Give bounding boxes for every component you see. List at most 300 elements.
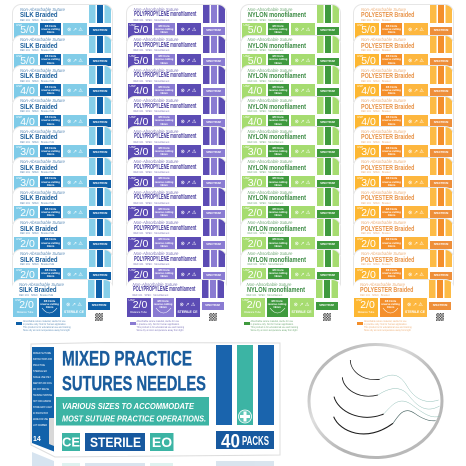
card: nylon 3/0: 3/0 [248,146,262,158]
card: silk 3/0: SILK Braided [20,163,58,172]
card: polyester 2/0 full pack: ⊗ ↗ ⚠ [407,302,423,308]
card: nylon 2/0: SPECTRUM [320,243,335,246]
card: polypropylene 4/0: 19mm [160,92,168,95]
title: SUTURES NEEDLES [62,372,206,396]
card: polypropylene 4/0 [126,65,226,102]
card: nylon 2/0: USP [244,206,250,210]
card: nylon 3/0: Non-Absorbable Suture [248,159,292,164]
card: polypropylene 3/0 [126,157,226,194]
card: nylon 2/0 full pack: USP [242,298,249,302]
card: polypropylene 5/0: reverse cutting [155,58,173,61]
card: polyester 5/0: ⊗ ↗ ⚠ [408,27,424,33]
card: nylon 4/0: SPECTRUM [320,121,335,124]
card: polyester 4/0: POLYESTER Braided [361,71,414,80]
card: silk 4/0: SILK Braided [20,71,58,80]
card: polyester 5/0 [353,4,454,41]
needle circle [309,344,442,458]
card: polyester 2/0: POLYESTER Braided [361,224,414,233]
card: polyester 2/0: Non-Absorbable Suture [361,220,406,225]
card: nylon 2/0: Non-Absorbable Suture [248,190,292,195]
card: silk 4/0: SILK Braided [20,102,58,111]
card: silk 2/0 full pack: Distance Tube [17,311,33,314]
card: nylon 3/0: NYLON monofilament [248,163,305,172]
card: polyester 2/0 full pack: Store dry at room temperature away from light [364,330,411,332]
card: silk 5/0 [12,35,113,72]
card: nylon 2/0 full pack: NYLON monofilament [246,285,304,294]
card: silk 4/0: ⊗ ↗ ⚠ [67,88,83,94]
card: polypropylene 2/0 full pack: SPECTRUM [205,304,220,307]
card: polypropylene 3/0: 3/0 [134,177,148,189]
card: nylon 3/0: ⊗ ↗ ⚠ [295,180,310,186]
card: polyester 2/0: Non-Absorbable Suture [361,251,406,256]
card: nylon 5/0: reverse cutting [269,58,287,61]
card: nylon 3/0: REF:101 SPEC Monofilament [248,171,283,174]
card: silk 2/0: 3/8 Circle [45,269,56,272]
card: polyester 3/0: 3/8 Circle [386,147,397,150]
card: polypropylene 3/0: reverse cutting [155,180,173,184]
card: silk 5/0: SILK Braided [20,10,58,19]
card: polypropylene 4/0: 3/8 Circle [158,116,170,119]
card: nylon 4/0: 19mm [274,92,282,95]
card: polyester 4/0: 19mm [388,123,395,126]
card: silk 2/0: Non-Absorbable Suture [20,190,65,195]
card: polypropylene 3/0: USP [130,176,136,180]
card: polyester 3/0: REF:101 SPEC Braided [361,141,390,144]
card: polyester 2/0: SPECTRUM [434,243,448,246]
card: polypropylene 2/0 full pack: This product is for educational use and training [136,327,184,329]
card: nylon 5/0: Non-Absorbable Suture [248,6,292,12]
card: silk 3/0 [12,126,113,163]
card: polypropylene 2/0: Non-Absorbable Suture [134,251,178,256]
card: polypropylene 2/0: ⊗ ↗ ⚠ [181,272,196,278]
card: polypropylene 4/0: SPECTRUM [206,121,221,124]
card: silk 5/0: 3/8 Circle [45,24,56,28]
card: silk 3/0: reverse cutting [41,150,60,153]
card: nylon 4/0: REF:101 SPEC Monofilament [248,80,283,83]
card: silk 2/0 full pack: SPECTRUM [92,304,106,307]
card: nylon 2/0 full pack: Non-Absorbable Suture [246,282,291,286]
banner [56,397,209,426]
card: silk 5/0: USP [16,23,22,27]
card: nylon 2/0: USP [244,268,250,272]
card: nylon 5/0: 19mm [274,62,282,64]
card: nylon 2/0: SPECTRUM [320,212,335,215]
card: silk 5/0: reverse cutting [41,58,60,61]
card: polypropylene 3/0: SPECTRUM [206,151,221,154]
card: polypropylene 2/0 full pack: Store dry at room temperature away from light [136,330,183,332]
card: nylon 3/0: Non-Absorbable Suture [248,129,292,134]
card: silk 3/0: ⊗ ↗ ⚠ [67,149,83,155]
card: polypropylene 4/0: REF:101 SPEC Monofilament [134,110,169,113]
card: nylon 5/0: 19mm [274,31,282,34]
card: polyester 5/0: 19mm [388,62,395,64]
card: nylon 4/0: ⊗ ↗ ⚠ [295,88,310,94]
card: silk 2/0: 19mm [47,214,54,217]
card: polypropylene 2/0: REF:101 SPEC Monofilament [134,202,169,205]
card: silk 3/0: Non-Absorbable Suture [20,129,65,134]
card: silk 2/0: ⊗ ↗ ⚠ [67,210,83,216]
card: polypropylene 5/0: SPECTRUM [206,60,221,63]
card: nylon 3/0: reverse cutting [269,180,287,184]
card: nylon 2/0: NYLON monofilament [248,224,305,233]
card: silk 2/0: REF:101 SPEC Braided Silk [20,202,54,205]
card: polyester 2/0: Non-Absorbable Suture [361,190,406,195]
card: polypropylene 4/0: ⊗ ↗ ⚠ [181,119,196,125]
box side panel: KEEP DRY AND COOL [33,381,52,385]
card: silk 4/0: reverse cutting [41,89,60,92]
card: polyester 2/0: 2/0 [361,268,376,280]
card: polyester 2/0 full pack: POLYESTER Braided [360,285,413,294]
card: nylon 2/0: Non-Absorbable Suture [248,220,292,225]
card: polypropylene 2/0: USP [130,237,136,241]
card: silk 3/0: Non-Absorbable Suture [20,159,65,164]
card: nylon 4/0: 3/8 Circle [272,86,284,89]
card: nylon 2/0: reverse cutting [269,242,287,245]
card: polyester 4/0: Non-Absorbable Suture [361,68,406,73]
card: polyester 2/0: ⊗ ↗ ⚠ [408,241,424,247]
card: polypropylene 4/0: 3/8 Circle [158,86,170,89]
card: polypropylene 4/0: 4/0 [134,116,148,128]
card: nylon 2/0: 2/0 [248,207,262,219]
panel: nylon suture packs [240,4,341,332]
card: polypropylene 2/0: reverse cutting [155,272,173,275]
card: polyester 2/0: reverse cutting [382,211,401,214]
card: polyester 5/0: Non-Absorbable Suture [361,6,406,12]
card: silk 2/0 full pack: Absorbable suture material, sterile for use [23,321,66,323]
40 packs badge [216,431,274,452]
card: polyester 5/0: POLYESTER Braided [361,41,414,50]
card: polypropylene 2/0: 19mm [160,245,168,248]
card: polyester 5/0: USP [357,23,363,27]
card: silk 5/0: Non-Absorbable Suture [20,37,65,42]
card: polyester 3/0: 19mm [388,153,395,156]
card: polyester 5/0: USP [357,54,363,58]
card: nylon 2/0 [240,218,340,255]
card: polyester 4/0: reverse cutting [382,89,401,92]
card: polypropylene 2/0: Non-Absorbable Suture [134,220,178,225]
card: silk 5/0: SPECTRUM [93,60,107,63]
card: polypropylene 4/0: USP [130,84,136,88]
card: polyester 2/0 full pack: 19mm [387,306,394,309]
card: nylon 2/0 [240,248,340,286]
card: silk 2/0: REF:101 SPEC Braided Silk [20,263,54,266]
card: polyester 2/0: 2/0 [361,238,376,250]
card: polypropylene 4/0: POLYPROPYLENE monofilament [134,72,196,79]
card: nylon 4/0: 4/0 [248,85,262,97]
card: silk 5/0: reverse cutting [41,28,60,31]
card: polyester 4/0: 3/8 Circle [386,116,397,119]
card: polyester 3/0: Non-Absorbable Suture [361,129,406,134]
card: polypropylene 2/0: SPECTRUM [206,274,221,276]
card: silk 4/0: USP [16,115,22,119]
card: polyester 2/0: USP [357,268,363,272]
card: polypropylene 2/0 full pack [126,279,226,336]
card: nylon 3/0 [240,126,340,163]
card: polypropylene 3/0: REF:101 SPEC Monofilament [134,171,169,174]
card: polyester 2/0: ⊗ ↗ ⚠ [408,272,424,278]
circular frame [309,344,442,458]
card: polypropylene 4/0: 19mm [160,123,168,126]
card: polypropylene 4/0: reverse cutting [155,119,173,122]
card: polypropylene 3/0: 3/8 Circle [158,147,170,150]
card: polypropylene 2/0: POLYPROPYLENE monofilament [134,256,196,262]
card: silk 3/0 [12,157,113,194]
card: polypropylene 2/0: ⊗ ↗ ⚠ [181,241,196,247]
card: silk 3/0: SPECTRUM [93,151,107,154]
card: silk 2/0: SILK Braided [20,254,58,264]
card: silk 2/0 full pack: ⊗ ↗ ⚠ [66,302,82,308]
card: polypropylene 5/0: USP [130,54,136,58]
card: polypropylene 5/0: REF:101 SPEC Monofilament [134,49,169,52]
card: silk 2/0: ⊗ ↗ ⚠ [67,241,83,247]
card: nylon 5/0: reverse cutting [269,28,287,31]
card: polypropylene 5/0: 3/8 Circle [158,24,170,28]
card: polyester 2/0: REF:101 SPEC Braided [361,232,390,235]
card: silk 2/0 full pack: STERILE CE [64,310,84,314]
card: polypropylene 3/0: POLYPROPYLENE monofilament [134,164,196,171]
card: polyester 5/0: SPECTRUM [434,29,448,32]
card: polypropylene 3/0: Non-Absorbable Suture [134,159,178,164]
box side panel: MIXED SUTURE [33,351,51,355]
card: polyester 3/0: reverse cutting [382,150,401,153]
box side panel: NOT FOR HUMANS [33,399,51,403]
card: silk 2/0 full pack: in practice only. Not for human application. [23,324,66,326]
card: silk 4/0: SPECTRUM [93,90,107,93]
card: silk 2/0 full pack [12,279,113,336]
card: polyester 5/0: 5/0 [361,24,376,36]
card: polypropylene 5/0 [126,35,226,72]
card: polyester 3/0 [353,157,454,194]
card: polyester 4/0: REF:101 SPEC Braided [361,110,390,113]
card: silk 2/0: reverse cutting [41,242,60,245]
card: polyester 3/0: Non-Absorbable Suture [361,159,406,164]
card: nylon 4/0: Non-Absorbable Suture [248,98,292,103]
card: polypropylene 5/0: 19mm [160,62,168,64]
card: nylon 2/0: ⊗ ↗ ⚠ [295,241,310,247]
card: polyester 4/0: SPECTRUM [434,121,448,124]
card: polypropylene 5/0: ⊗ ↗ ⚠ [181,58,196,64]
card: nylon 3/0: USP [244,176,250,180]
card: polyester 2/0: USP [357,237,363,241]
box side panel: PRACTICE [33,363,45,367]
card: nylon 4/0 [240,96,340,133]
card: silk 3/0: reverse cutting [41,180,60,184]
card: polypropylene 4/0: ⊗ ↗ ⚠ [181,88,196,94]
card: nylon 2/0 full pack: reverse cutting [268,303,286,306]
title [62,348,206,396]
card: polypropylene 5/0: 5/0 [134,24,148,36]
card: polypropylene 2/0: 3/8 Circle [158,208,170,211]
card: polyester 5/0: 3/8 Circle [386,24,397,28]
card: polypropylene 3/0: reverse cutting [155,150,173,153]
card: polypropylene 2/0 full pack: reverse cutting [154,303,172,306]
card: nylon 2/0 full pack: in practice only. Not for human application. [250,324,294,326]
box reflection [32,452,274,466]
card: polyester 2/0 full pack: Non-Absorbable Suture [360,282,405,286]
card: polypropylene 2/0 full pack: USP [128,298,135,302]
card: nylon 5/0: SPECTRUM [320,29,335,32]
card: nylon 2/0 [240,187,340,224]
card: polypropylene 2/0 full pack: ⊗ ↗ ⚠ [180,302,195,308]
card: polypropylene 5/0: 3/8 Circle [158,55,170,58]
card: nylon 4/0: ⊗ ↗ ⚠ [295,119,310,125]
card: polypropylene 5/0: ⊗ ↗ ⚠ [181,27,196,33]
box side panel: 40 PACKS BOX [33,411,48,415]
card: nylon 5/0: REF:101 SPEC Monofilament [248,18,283,22]
card: polyester 5/0: POLYESTER Braided [361,10,414,19]
card: silk 5/0: SPECTRUM [93,29,107,32]
card: polypropylene 2/0: SPECTRUM [206,243,221,246]
card: polyester 2/0 [353,248,454,286]
card: silk 2/0: USP [16,237,22,241]
box side panel: STERILE EO [33,369,48,373]
card: silk 5/0 [12,4,113,41]
card: polypropylene 2/0: ⊗ ↗ ⚠ [181,210,196,216]
card: polyester 2/0: SPECTRUM [434,212,448,215]
card: nylon 2/0 full pack: Store dry at room temperature away from light [250,330,297,332]
card: polypropylene 3/0: POLYPROPYLENE monofilament [134,133,196,140]
card: silk 5/0: 3/8 Circle [45,55,56,58]
card: nylon 2/0 full pack: 3/8 Circle [271,300,283,302]
card: polypropylene 4/0: USP [130,115,136,119]
card: polyester 2/0: USP [357,206,363,210]
card: polypropylene 3/0 [126,126,226,163]
card: nylon 2/0: 3/8 Circle [272,238,284,241]
CE badge: CE [62,434,80,450]
card: silk 2/0: SILK Braided [20,193,58,202]
card: nylon 2/0: 2/0 [248,268,262,280]
card: silk 5/0: SILK Braided [20,41,58,50]
card: silk 2/0: 19mm [47,245,54,248]
card: nylon 3/0: USP [244,145,250,149]
card: polyester 3/0: 3/8 Circle [386,177,397,180]
card: silk 4/0: 3/8 Circle [45,116,56,119]
card: polyester 5/0 [353,35,454,72]
card: polyester 5/0: SPECTRUM [434,60,448,63]
card: polypropylene 3/0: 3/8 Circle [158,177,170,180]
card: silk 2/0 full pack: 3/8 Circle [44,300,55,302]
sterile badge: STERILE [90,434,141,450]
card: polyester 2/0: POLYESTER Braided [361,193,414,202]
card: polyester 3/0: POLYESTER Braided [361,163,414,172]
card: silk 4/0: 19mm [47,92,54,95]
card: polypropylene 3/0: Non-Absorbable Suture [134,129,178,134]
card: polyester 2/0 full pack [353,279,454,336]
card: silk 2/0 full pack: 19mm [46,306,53,309]
card: nylon 4/0: SPECTRUM [320,90,335,93]
card: nylon 2/0 full pack: REF:101 SPEC Monofilament [246,294,282,296]
card: polypropylene 2/0 full pack: Distance Tube [130,311,147,314]
card: polypropylene 2/0: POLYPROPYLENE monofilament [134,225,196,232]
card: polypropylene 2/0 full pack: Absorbable suture material, sterile for use [136,321,179,323]
card: polypropylene 2/0 full pack: 2/0 [133,299,147,311]
card: nylon 2/0 full pack: SPECTRUM [319,304,334,307]
card: silk 2/0: ⊗ ↗ ⚠ [67,272,83,278]
card: silk 2/0 full pack: SILK Braided [19,285,57,294]
card: polypropylene 2/0: 19mm [160,275,168,278]
card: polyester 2/0 full pack: STERILE CE [405,310,425,314]
card: silk 2/0 full pack: USP [15,298,21,302]
card: nylon 4/0: Non-Absorbable Suture [248,68,292,73]
card: polyester 4/0: SPECTRUM [434,90,448,93]
card: nylon 5/0: ⊗ ↗ ⚠ [295,58,310,64]
panel: silk suture packs [12,4,113,332]
card: nylon 4/0: 19mm [274,123,282,126]
icon: medical cross [238,410,252,423]
card: polypropylene 4/0: Non-Absorbable Suture [134,98,178,103]
card: nylon 2/0: REF:101 SPEC Monofilament [248,232,283,235]
card: polyester 3/0: SPECTRUM [434,182,448,185]
card: nylon 4/0: 3/8 Circle [272,116,284,119]
card: silk 2/0: 2/0 [20,268,35,280]
card: polyester 5/0: REF:101 SPEC Braided [361,49,390,52]
card: polypropylene 2/0: 3/8 Circle [158,269,170,272]
card: nylon 2/0: USP [244,237,250,241]
card: silk 5/0: 19mm [47,31,54,34]
card: silk 2/0 [12,218,113,255]
card: silk 5/0: ⊗ ↗ ⚠ [67,58,83,64]
card: polypropylene 4/0: Non-Absorbable Suture [134,68,178,73]
card: silk 5/0: 5/0 [20,55,35,67]
card: nylon 3/0: ⊗ ↗ ⚠ [295,149,310,155]
card: polypropylene 4/0 [126,96,226,133]
card: nylon 4/0 [240,65,340,102]
card: silk 2/0: 19mm [47,275,54,278]
card: silk 2/0 [12,187,113,224]
product box [31,342,280,466]
card: nylon 2/0: NYLON monofilament [248,254,305,264]
card: silk 4/0: 4/0 [20,85,35,97]
card: polyester 5/0: reverse cutting [382,58,401,61]
card: nylon 5/0: ⊗ ↗ ⚠ [295,27,310,33]
card: nylon 3/0: REF:101 SPEC Monofilament [248,141,283,144]
card: nylon 4/0: NYLON monofilament [248,102,305,111]
card: silk 2/0: REF:101 SPEC Braided Silk [20,232,54,235]
card: polyester 4/0: reverse cutting [382,119,401,122]
card: polypropylene 2/0: Non-Absorbable Suture [134,190,178,195]
card: polyester 3/0: POLYESTER Braided [361,132,414,141]
card: polypropylene 2/0 [126,248,226,286]
card: polypropylene 2/0: 19mm [160,214,168,217]
card: polyester 2/0: SPECTRUM [434,274,448,276]
card: nylon 2/0: SPECTRUM [320,274,335,276]
card: nylon 2/0 full pack: This product is for educational use and training [250,327,298,329]
card: nylon 5/0 [240,35,340,72]
card: silk 4/0: 3/8 Circle [45,86,56,89]
card: polyester 3/0: ⊗ ↗ ⚠ [408,180,424,186]
card: polypropylene 2/0: USP [130,206,136,210]
card: polyester 3/0: ⊗ ↗ ⚠ [408,149,424,155]
card: silk 2/0 full pack: reverse cutting [40,303,59,306]
card: silk 2/0: USP [16,268,22,272]
card: polypropylene 2/0: 3/8 Circle [158,238,170,241]
box side panel: INSTRUCTIONS FOR [33,357,53,361]
card: nylon 5/0: SPECTRUM [320,60,335,63]
card: silk 4/0: Non-Absorbable Suture [20,98,65,103]
card: polyester 3/0: 3/0 [361,146,376,158]
card: polypropylene 2/0 [126,218,226,255]
card: polypropylene 5/0: Non-Absorbable Suture [134,6,178,12]
card: silk 3/0: 3/8 Circle [45,177,56,180]
card: silk 4/0: SPECTRUM [93,121,107,124]
card: polyester 2/0: ⊗ ↗ ⚠ [408,210,424,216]
card: polyester 4/0: Non-Absorbable Suture [361,98,406,103]
card: polypropylene 2/0: 2/0 [134,268,148,280]
card: polypropylene 3/0: 3/0 [134,146,148,158]
card: nylon 2/0: Non-Absorbable Suture [248,251,292,256]
card: nylon 3/0 [240,157,340,194]
box side panel: DO NOT REUSE [33,387,49,391]
